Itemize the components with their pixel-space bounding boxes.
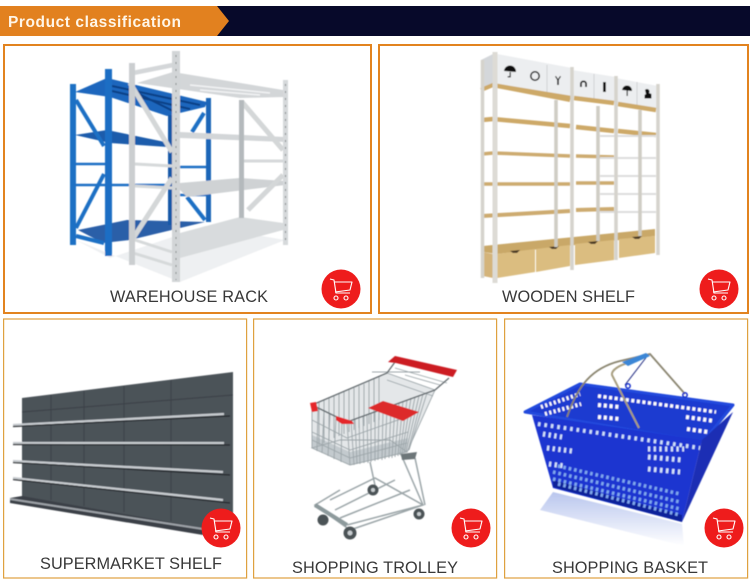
label: SHOPPING BASKET bbox=[552, 559, 708, 577]
label: WAREHOUSE RACK bbox=[110, 288, 268, 306]
header banner bbox=[0, 6, 750, 36]
image: blue shopping basket bbox=[525, 353, 733, 546]
image: blue and white warehouse racks bbox=[70, 51, 288, 282]
panel: supermarket shelf bbox=[4, 319, 247, 578]
panel: shopping trolley bbox=[254, 319, 497, 578]
label: SHOPPING TROLLEY bbox=[292, 559, 458, 577]
title: Product classification bbox=[8, 14, 181, 31]
image: wooden shelf unit bbox=[481, 52, 658, 283]
icon: cart button bbox=[322, 270, 360, 308]
icon: cart button bbox=[452, 508, 490, 548]
icons: shelf header pictograms bbox=[504, 65, 652, 98]
label: WOODEN SHELF bbox=[502, 288, 635, 306]
label: SUPERMARKET SHELF bbox=[40, 555, 222, 573]
panel: shopping basket bbox=[505, 319, 748, 578]
panel: wooden shelf bbox=[379, 45, 748, 313]
image: supermarket wall shelf bbox=[10, 372, 233, 535]
image: shopping trolley bbox=[310, 356, 457, 540]
icon: cart button bbox=[700, 270, 738, 308]
icon: cart button bbox=[202, 508, 240, 548]
panel: warehouse rack bbox=[4, 45, 371, 313]
icon: cart button bbox=[704, 508, 744, 548]
